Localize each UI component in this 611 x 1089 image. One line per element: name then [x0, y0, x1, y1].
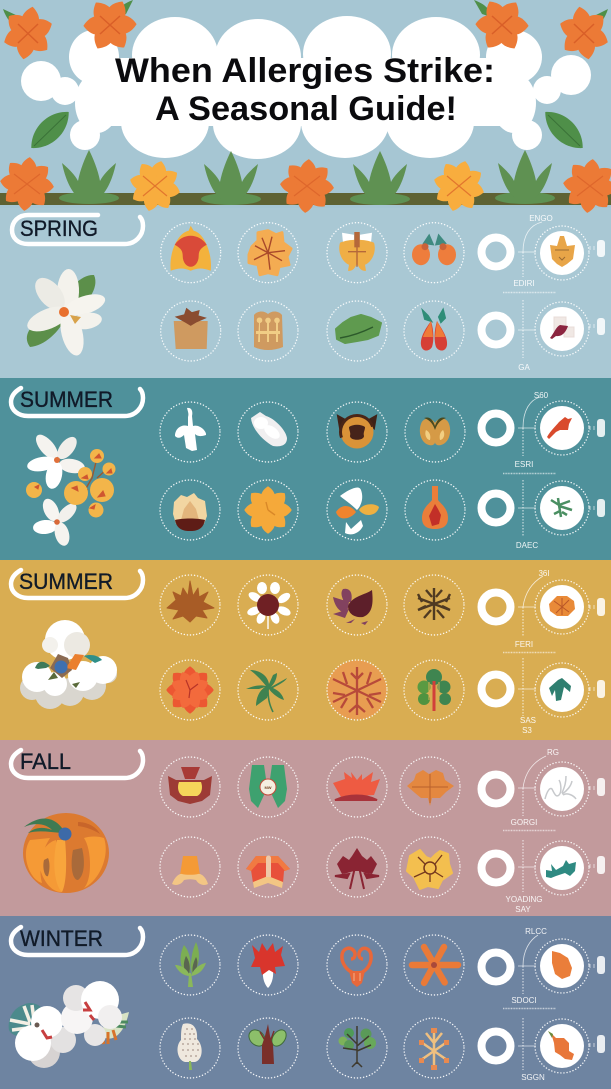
allergen icon: green tree — [327, 1018, 387, 1078]
annotation: gold summer rings and labels — [482, 569, 556, 735]
annotation: summer allergy rings and labels: ESRI — [515, 460, 533, 469]
cloud — [21, 16, 591, 159]
allergen icon: yellow bell — [161, 223, 221, 283]
allergen icon: red house-shaped bloom — [238, 837, 298, 897]
allergen icon: orange cap — [160, 837, 220, 897]
allergen icon: orange pollen butterfly — [327, 223, 387, 283]
heading: summer gold: SUMMER — [19, 569, 113, 594]
heading: summer: SUMMER — [20, 387, 113, 412]
allergen disc: green sprig — [535, 481, 589, 535]
illustration: white magnolia flower — [24, 269, 108, 358]
allergen icon: orange fruit pair — [404, 223, 464, 283]
allergen icon: green patterned pods: MW — [264, 785, 272, 790]
annotation: gold summer rings and labels: SAS — [520, 716, 536, 725]
allergen icon: red flower — [160, 660, 220, 720]
allergen icon: brown animal face — [327, 402, 387, 462]
allergen disc: teal leaf — [535, 663, 589, 717]
allergen icon: white sprout — [160, 402, 220, 462]
allergen icon: orange leaf — [238, 223, 298, 283]
allergen icon: green palm leaf — [238, 660, 298, 720]
allergen icon: orange branching coral — [327, 660, 387, 720]
allergen icon: tan box with brown tuft — [161, 301, 221, 361]
allergen icon: golden nut halves — [405, 402, 465, 462]
allergen icon: pale pine cone — [160, 1018, 220, 1078]
annotation: winter allergy rings and labels: SGGN — [521, 1073, 545, 1082]
ground strip — [0, 193, 611, 205]
annotation: summer allergy rings and labels: S60 — [534, 391, 549, 400]
annotation: fall allergy rings and labels: SAY — [515, 905, 531, 914]
heading: winter: WINTER — [20, 926, 103, 951]
grass tufts — [59, 150, 555, 205]
panel: summer gold — [0, 560, 611, 740]
allergen disc: orange lobed leaf — [535, 1019, 589, 1073]
allergen disc: teal fragment — [535, 841, 589, 895]
heading: fall — [11, 749, 143, 778]
annotation: spring allergy rings and labels: GA — [518, 363, 530, 372]
allergen icon: plum beetroot leaves — [327, 575, 387, 635]
allergen disc: pale petal with red centre — [535, 302, 589, 356]
allergen disc: orange leaf — [535, 580, 589, 634]
allergen icon: green tree with red trunk — [404, 660, 464, 720]
side leaves — [23, 104, 591, 156]
annotation: fall allergy rings and labels — [482, 748, 559, 914]
panel: spring — [0, 208, 611, 378]
allergen icon: white and orange petals — [327, 480, 387, 540]
annotation: winter allergy rings and labels: RLCC — [525, 927, 547, 936]
allergen disc: amber flower — [535, 226, 589, 280]
bottom flowers — [0, 154, 611, 217]
heading: summer gold — [11, 569, 143, 598]
allergen icon: brown stump with leaves — [238, 1018, 298, 1078]
allergen icon: cream hazelnut — [160, 480, 220, 540]
allergen icon: maroon burr with white petals — [238, 575, 298, 635]
side tags: fall — [590, 778, 605, 874]
illustration: orange pumpkin — [23, 813, 109, 893]
annotation: fall allergy rings and labels: YOADING — [506, 895, 542, 904]
side tags: summer — [590, 419, 605, 517]
allergen icon: yellow leaf with brown veins — [400, 837, 460, 897]
annotation: winter allergy rings and labels — [482, 927, 556, 1082]
title: A Seasonal Guide! — [155, 90, 457, 128]
annotation: gold summer rings and labels: FERI — [515, 640, 533, 649]
annotation: spring allergy rings and labels — [482, 214, 556, 372]
allergen icon: brown twig star — [404, 575, 464, 635]
allergen icon: green patterned pods — [238, 757, 298, 817]
allergen icon: dark red plant — [327, 837, 387, 897]
allergen icon: red carrot pair — [404, 301, 464, 361]
allergen disc: red sprig — [535, 401, 589, 455]
allergen icon: red lotus — [327, 757, 387, 817]
heading: spring — [12, 215, 143, 244]
annotation: summer allergy rings and labels: DAEC — [516, 541, 538, 550]
allergen icon: green leaf — [327, 301, 387, 361]
allergen icon: tan seed pod — [238, 301, 298, 361]
allergen icon: orange gourd with red seed — [405, 480, 465, 540]
heading: summer — [11, 387, 143, 416]
allergen icon: orange swirl shield — [327, 935, 387, 995]
annotation: gold summer rings and labels: S3 — [522, 726, 532, 735]
annotation: spring allergy rings and labels: EDIRI — [513, 279, 535, 288]
annotation: spring allergy rings and labels: ENGO — [529, 214, 553, 223]
panel: summer teal — [0, 378, 611, 560]
annotation: gold summer rings and labels: 36I — [538, 569, 550, 578]
allergen icon: orange star limbs — [404, 935, 464, 995]
illustration: snowy cotton with striped fans — [9, 981, 129, 1068]
allergen icon: red-brown shell with yellow centre — [160, 757, 220, 817]
annotation: winter allergy rings and labels: SDOCI — [511, 996, 537, 1005]
allergen disc: orange blob — [535, 939, 589, 993]
heading: spring: SPRING — [20, 216, 98, 241]
annotation: fall allergy rings and labels: GORGI — [511, 818, 537, 827]
annotation: fall allergy rings and labels: RG — [547, 748, 559, 757]
side tags: winter — [590, 956, 605, 1053]
corner sprigs — [3, 0, 608, 28]
allergen icon: green sprout leaves — [160, 935, 220, 995]
allergen icon: peach molecule — [404, 1018, 464, 1078]
side tags: gold summer — [590, 598, 605, 698]
title — [115, 52, 495, 128]
annotation: summer allergy rings and labels — [482, 391, 556, 550]
heading: winter — [11, 926, 143, 955]
title: When Allergies Strike: — [115, 52, 495, 90]
allergen icon: white pod — [238, 402, 298, 462]
allergen disc: grey branching lines — [535, 762, 589, 816]
illustration: white blossoms with amber berries — [26, 431, 116, 547]
panel: fall — [0, 740, 611, 916]
heading: fall: FALL — [20, 749, 71, 774]
allergen icon: red spiky flower on white stem — [238, 935, 298, 995]
panel: header — [0, 0, 611, 217]
panel: winter — [0, 916, 611, 1089]
illustration: cotton clouds with coloured seeds — [20, 620, 117, 709]
top flowers — [0, 0, 611, 64]
allergen icon: brown spiky grass — [160, 575, 220, 635]
allergen icon: orange oak leaf — [400, 757, 460, 817]
side tags: spring — [590, 240, 605, 335]
allergen icon: orange daisy — [238, 480, 298, 540]
